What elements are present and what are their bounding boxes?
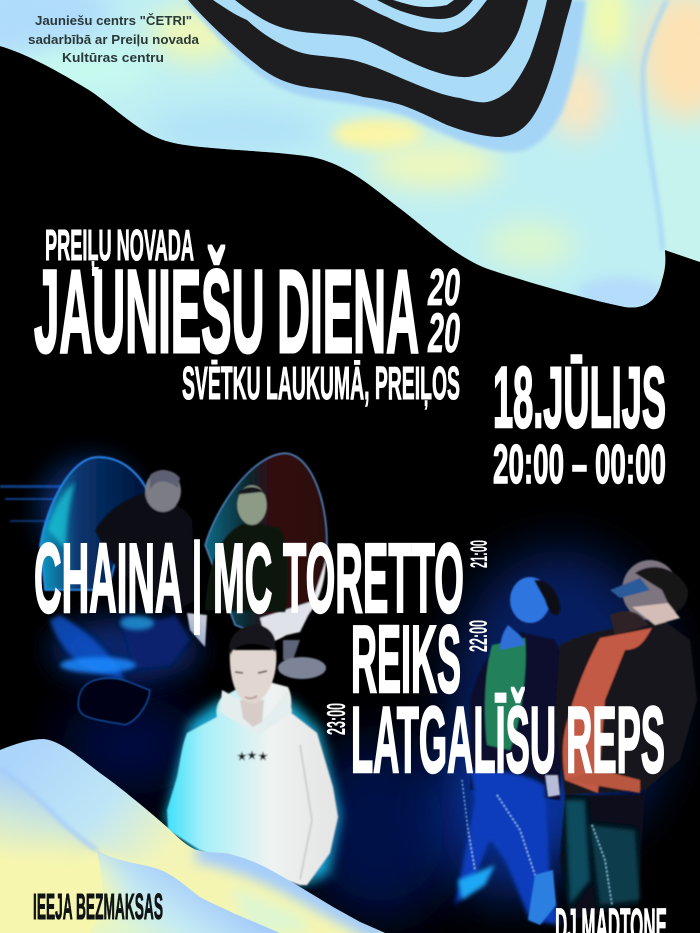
photo: right egg chair xyxy=(205,453,327,679)
time 22:00: 22:00 xyxy=(465,620,493,652)
stars on hoodie: ★ xyxy=(258,751,268,763)
heading: Jauniešu diena xyxy=(34,245,419,378)
photo: singer in white hoodie xyxy=(165,625,340,885)
photo: man in orange hoodie xyxy=(545,560,697,920)
bottom wave shape xyxy=(0,735,400,933)
photo: chair base in blue glow xyxy=(50,615,200,725)
right fold xyxy=(665,250,700,262)
photo: man in green shirt xyxy=(455,577,565,925)
poster: REIKS xyxy=(351,606,461,713)
stars on hoodie xyxy=(237,750,268,763)
organiser note: Kultūras centru xyxy=(62,51,164,65)
blue halo around swirl xyxy=(185,0,586,152)
poster: IEEJA BEZMAKSAS xyxy=(33,886,163,927)
top wave shape xyxy=(0,0,700,320)
swirl outer black xyxy=(188,0,572,137)
photo: Chaina and MC Toretto xyxy=(95,470,288,647)
year 2020: 20 xyxy=(427,301,460,364)
navy ambient glow xyxy=(60,550,670,920)
organiser note xyxy=(28,13,200,65)
stars on hoodie: ★ xyxy=(237,751,247,763)
poster: 21:00 xyxy=(466,540,493,568)
poster: 23:00 xyxy=(321,703,351,735)
year 2020 xyxy=(427,259,460,364)
organiser note: Jauniešu centrs "ČETRI" xyxy=(35,13,192,28)
photo: left egg chair xyxy=(0,457,150,590)
stars on hoodie: ★ xyxy=(247,750,257,762)
year 2020: 20 xyxy=(427,259,460,317)
poster: PREIĻU NOVADA xyxy=(45,221,194,270)
organiser note: sadarbībā ar Preiļu novada xyxy=(28,33,200,47)
